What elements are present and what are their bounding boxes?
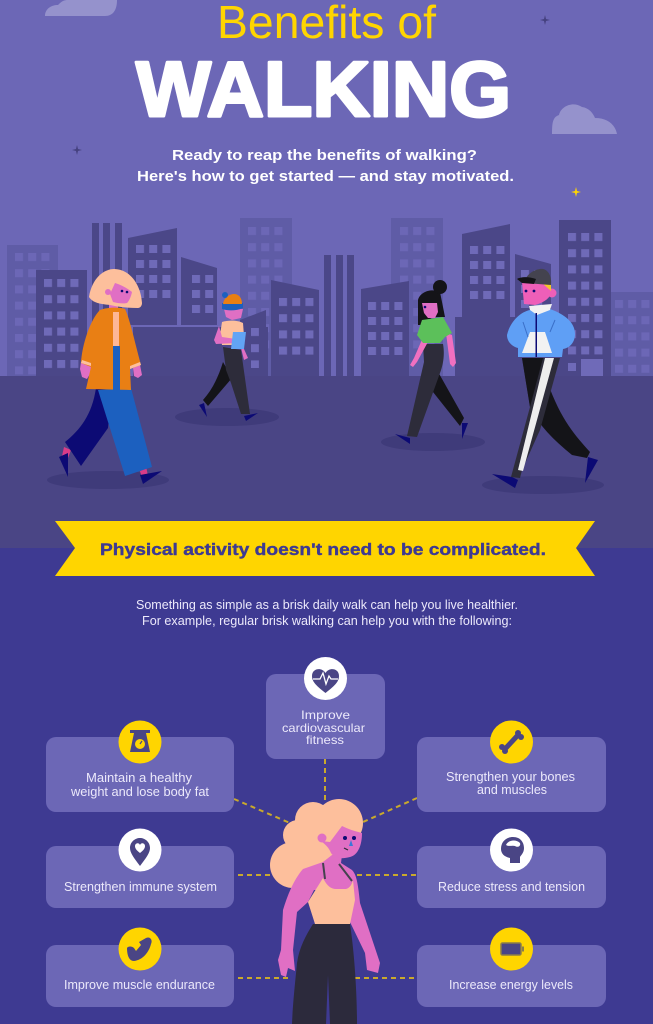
star: top right xyxy=(540,15,550,25)
intro text xyxy=(137,147,514,185)
icon: heart with pulse xyxy=(312,669,339,693)
cloud: right xyxy=(552,104,617,134)
ear xyxy=(318,834,326,842)
card: healthy weight xyxy=(46,720,234,812)
walker: woman in green shirt xyxy=(381,280,485,451)
icon: battery xyxy=(501,943,524,955)
card: muscle endurance xyxy=(46,928,234,1007)
walker: woman in orange coat xyxy=(47,269,169,489)
subtitle text: Something as simple as a brisk daily walk can help you live healthier. xyxy=(136,598,518,612)
card text: Strengthen your bones xyxy=(446,770,575,784)
star: yellow xyxy=(571,187,581,197)
card text: Strengthen immune system xyxy=(64,880,217,894)
card text: fitness xyxy=(306,733,344,747)
icon: scale xyxy=(130,730,150,752)
subtitle text: For example, regular brisk walking can help you with the following: xyxy=(142,614,512,628)
card: stress and tension xyxy=(417,828,606,908)
connector lines xyxy=(234,759,417,978)
face xyxy=(321,826,362,858)
background: lower section xyxy=(0,548,653,1024)
banner text: Physical activity doesn't need to be complicated. xyxy=(100,540,546,559)
walker: man in blue jacket xyxy=(482,269,604,494)
icon: flexed arm xyxy=(127,937,152,961)
intro text: Here's how to get started — and stay motivated. xyxy=(137,168,514,185)
title: WALKING: WALKING xyxy=(136,45,511,133)
city skyline xyxy=(7,218,653,376)
eyes and nose xyxy=(343,836,356,850)
pants xyxy=(292,924,357,1024)
card: bones and muscles xyxy=(417,720,606,812)
card: immune system xyxy=(46,828,234,908)
card text: Improve xyxy=(301,708,350,722)
card text xyxy=(446,770,575,797)
card text xyxy=(282,708,365,747)
walker: child with tablet xyxy=(175,292,279,426)
body and arms xyxy=(278,855,380,977)
card text xyxy=(70,771,210,799)
cloud: top left xyxy=(45,0,117,16)
intro text: Ready to reap the benefits of walking? xyxy=(172,147,477,164)
card text: Increase energy levels xyxy=(449,978,573,992)
far buildings xyxy=(7,218,653,376)
central figure xyxy=(270,799,380,1024)
icon: heart pin xyxy=(130,838,150,866)
banner xyxy=(55,521,595,576)
chest xyxy=(308,878,355,924)
near buildings xyxy=(36,220,611,376)
card text: Maintain a healthy xyxy=(86,771,193,785)
ground xyxy=(0,376,653,548)
icon: bone xyxy=(499,730,524,754)
card text: cardiovascular xyxy=(282,721,365,735)
star: left xyxy=(72,145,82,155)
straps xyxy=(323,863,352,881)
card: cardiovascular fitness xyxy=(266,657,385,759)
hair xyxy=(270,799,363,888)
card text: Improve muscle endurance xyxy=(64,978,215,992)
card text: and muscles xyxy=(477,783,547,797)
windows xyxy=(44,233,604,376)
card: energy levels xyxy=(417,928,606,1007)
subtitle text xyxy=(136,598,518,628)
card text: weight and lose body fat xyxy=(70,785,210,799)
icon: head with brain xyxy=(501,837,524,863)
background: sky xyxy=(0,0,653,380)
card text: Reduce stress and tension xyxy=(438,880,585,894)
